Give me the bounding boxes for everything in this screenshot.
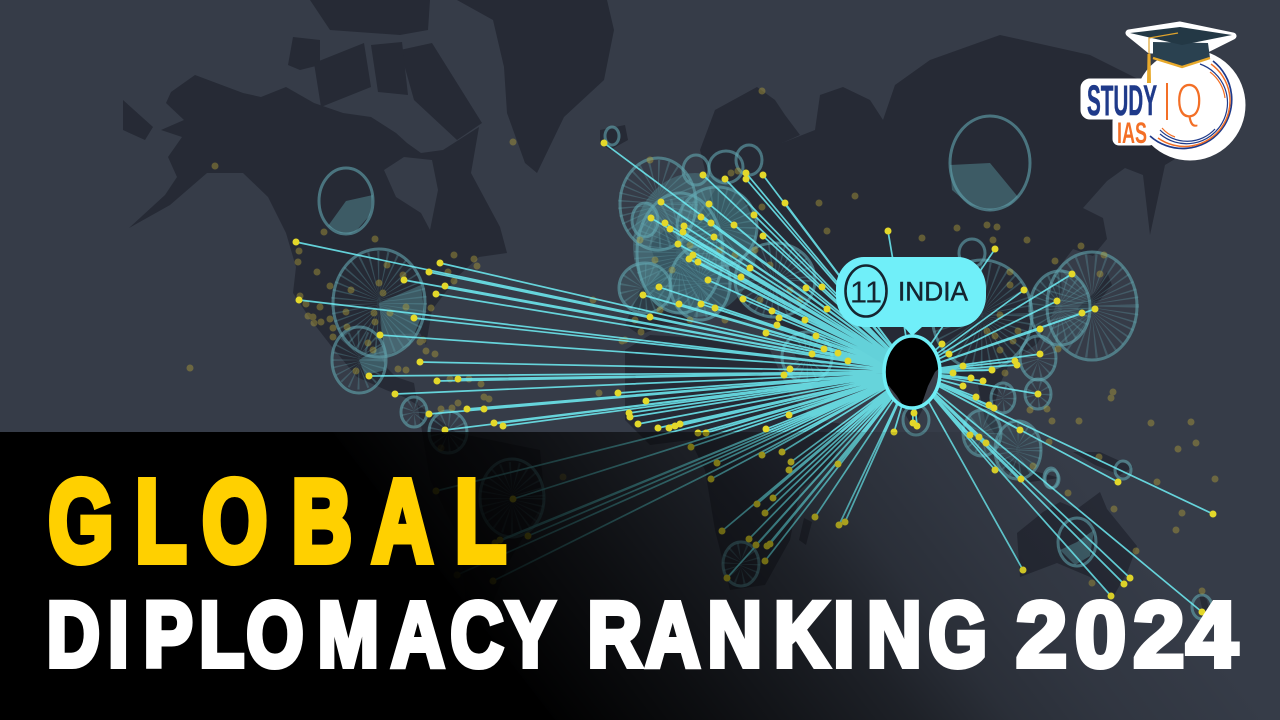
subtitle: DIPLOMACY RANKING 2024 [47, 582, 1238, 686]
partner country endpoint dots [296, 143, 1213, 612]
country hub rings with spokes [319, 116, 1212, 619]
black gradient title band [0, 432, 1280, 720]
label: rank 11 India [836, 257, 986, 336]
logo orbit rings [1150, 61, 1232, 149]
IAS wordmark: IAS [1117, 117, 1147, 150]
country name: INDIA [898, 276, 968, 306]
rank badge [846, 266, 886, 316]
rank badge: 11 [850, 274, 882, 310]
world map land masses [123, 0, 1215, 640]
IQ wordmark: Q [1176, 74, 1202, 130]
faint secondary location dots [190, 91, 1215, 672]
logo white backing [1081, 25, 1245, 160]
graduation cap [1130, 27, 1232, 83]
word: RANKING: RANKING [588, 583, 987, 686]
title: GLOBAL: GLOBAL [49, 458, 506, 586]
India hub circle with map silhouette [882, 334, 942, 410]
IQ divider [1166, 83, 1168, 120]
logo: Study IQ IAS: STUDY [1087, 77, 1157, 125]
diplomatic connection lines from India [296, 143, 1213, 612]
word: DIPLOMACY: DIPLOMACY [47, 583, 555, 686]
number: 2024: 2024 [1016, 582, 1238, 686]
logo: Study IQ IAS [1081, 25, 1245, 160]
